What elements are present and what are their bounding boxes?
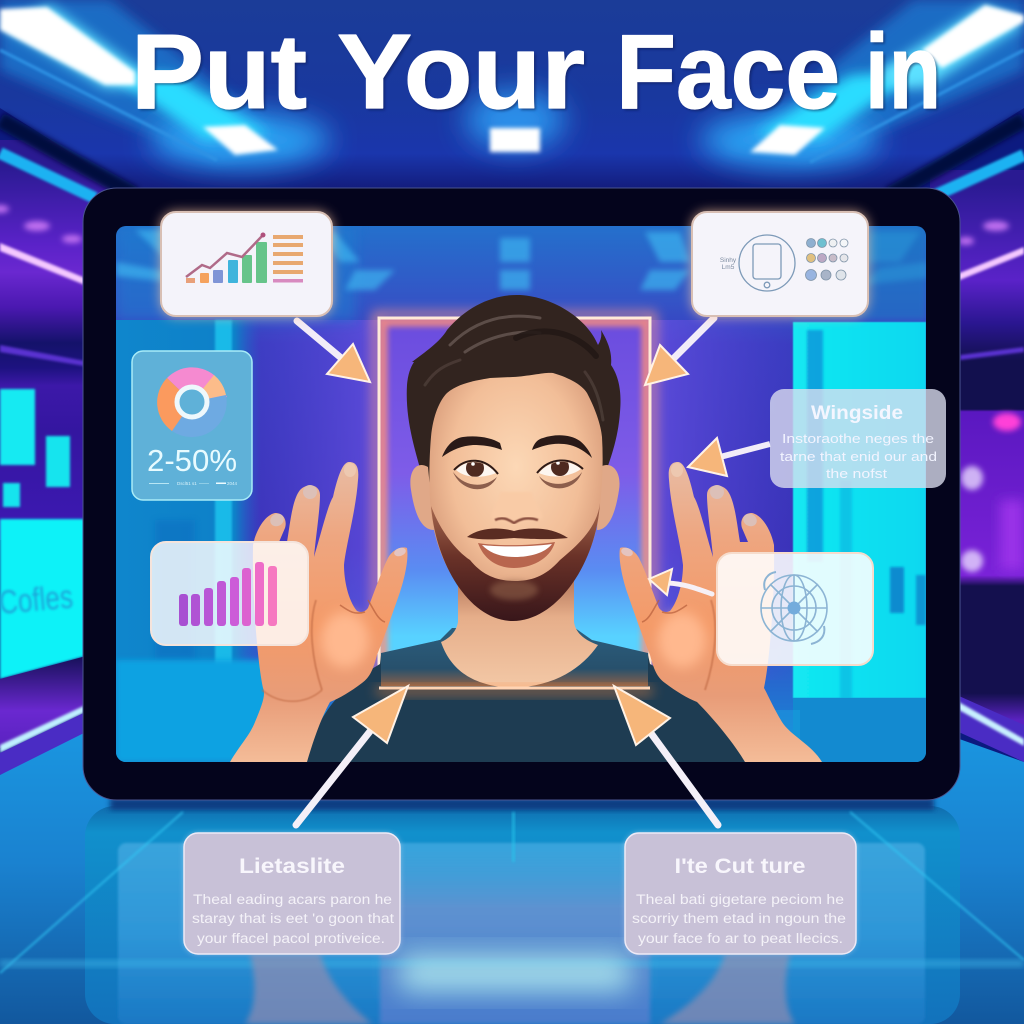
bars [179, 562, 277, 626]
shirt body below the frame [305, 640, 745, 762]
left hand [230, 462, 407, 762]
body text: tarne that enid our and [780, 449, 937, 464]
moustache [467, 529, 568, 539]
card: device and icon dots [692, 212, 868, 316]
nose [492, 492, 542, 524]
card: I'te Cut ture note [625, 833, 856, 954]
arrow: Wingside note to hand [688, 438, 770, 476]
background: right wall [930, 170, 1024, 762]
background: reflective floor [0, 730, 1024, 1024]
screen: lower floor band [322, 710, 800, 739]
palm shading, creases and nails [620, 463, 759, 690]
right eyebrow [532, 435, 592, 458]
small label: Lm5 [722, 264, 735, 271]
background: left wall [0, 140, 110, 775]
card: donut statistic [132, 351, 252, 500]
left ear [410, 465, 434, 530]
small label: Sinhy [720, 257, 736, 264]
title: Your [339, 15, 587, 133]
arrow: I'te Cut ture note to frame [614, 686, 718, 825]
face [429, 373, 603, 620]
arrow: device card to frame [645, 318, 714, 385]
tablet screen [116, 226, 926, 762]
card: purple bar chart [151, 542, 308, 645]
hair silhouette [407, 295, 621, 500]
title: Your [337, 13, 585, 131]
glow around the frame's lower edge [376, 686, 653, 696]
rising bars [186, 232, 267, 283]
portrait frame: fill, glow and outline [376, 315, 653, 691]
right eye [537, 458, 583, 488]
body text: the nofst [826, 466, 887, 481]
donut chart [157, 367, 227, 437]
body text: Theal eading acars paron he [193, 892, 392, 907]
globe icon [761, 572, 827, 644]
card: globe [717, 553, 873, 665]
background: diagonal ceiling edge stripes [0, 120, 1024, 200]
heading: Lietaslite [239, 855, 345, 878]
body text: Instoraothe neges the [782, 431, 934, 446]
donut value: 2-50% [147, 443, 237, 478]
tiny legend: 2044 [227, 481, 238, 486]
screen: ceiling streaks [116, 230, 926, 290]
title: Face [616, 13, 840, 131]
tiny legend: Dscl51 s1 [177, 481, 197, 486]
heading: Wingside [811, 403, 903, 424]
body text: staray that is eet 'o goon that [192, 911, 394, 926]
title: Put [133, 15, 309, 133]
mouth and teeth [478, 542, 555, 568]
title [131, 13, 943, 133]
screen: right cyan columns [793, 226, 926, 762]
right hand [620, 462, 822, 762]
body text: scorriy them etad in ngoun the [632, 911, 846, 926]
card: line and bar chart [161, 212, 332, 316]
tiny legend [149, 481, 238, 486]
glowing tablet body [83, 188, 960, 800]
title: in [867, 15, 943, 133]
title: Face [618, 15, 842, 133]
arrow: Lietaslite note to frame [296, 686, 408, 825]
left eyebrow [442, 436, 502, 457]
body text [632, 892, 846, 946]
body text [192, 892, 394, 946]
beard [431, 503, 600, 621]
right ear [597, 465, 620, 530]
arrow: globe card to thumb [649, 569, 712, 595]
body text: Theal bati gigetare peciom he [636, 892, 844, 907]
card: Wingside note [770, 389, 946, 488]
body text [780, 431, 937, 481]
tablet icon [739, 235, 795, 291]
icon dots [806, 238, 848, 280]
heading: I'te Cut ture [674, 855, 806, 878]
title: in [865, 13, 941, 131]
screen: left cyan columns [116, 226, 356, 762]
legend lines [273, 235, 303, 282]
body text: your face fo ar to peat llecics. [638, 931, 843, 946]
faint wall sign: Cofles [0, 578, 74, 621]
body text: your ffacel pacol protiveice. [197, 931, 385, 946]
left eye [453, 459, 498, 489]
title: Put [131, 13, 307, 131]
portrait: man's face [379, 295, 650, 688]
neck and chest [441, 570, 598, 688]
arrow: chart card to frame [297, 321, 370, 382]
hair highlights [425, 316, 603, 420]
palm shading, creases and nails [262, 463, 407, 701]
card: Lietaslite note [184, 833, 400, 954]
shirt inside frame [381, 628, 648, 686]
frame: line across the shirt [379, 686, 650, 690]
background: ceiling [0, 0, 1024, 192]
